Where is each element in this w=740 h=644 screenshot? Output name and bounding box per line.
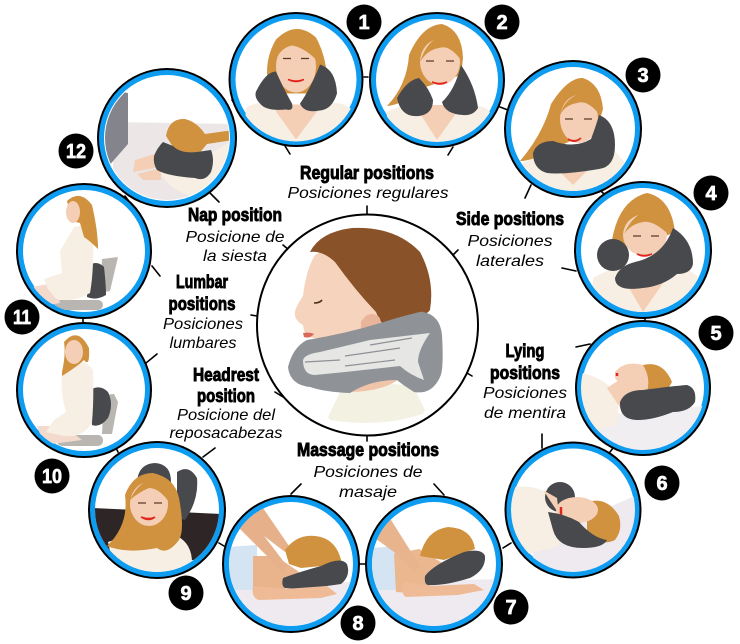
label: nap position: la siesta [203, 248, 267, 265]
label: lying positions [483, 341, 567, 422]
label: lumbar positions: lumbares [170, 335, 236, 352]
number badge 7 [494, 590, 528, 624]
number badge 12: 12 [66, 141, 86, 163]
label: headrest position: Posicione del [177, 407, 275, 424]
label: regular positions: Posiciones regulares [288, 185, 448, 202]
circle 9: headrest [88, 441, 226, 579]
number badge 6: 6 [656, 473, 668, 495]
circle 3: side position right [504, 60, 642, 201]
label: massage positions [297, 440, 439, 501]
number badge 2 [484, 4, 520, 40]
number badge 9: 9 [180, 583, 192, 605]
label: headrest position: Headrest [193, 365, 259, 385]
number badge 9 [168, 576, 204, 610]
number badge 4: 4 [705, 183, 717, 205]
label: side positions: laterales [476, 253, 544, 270]
circle 7: massage [364, 495, 503, 634]
number badge 6 [644, 466, 680, 500]
number badge 2: 2 [496, 12, 508, 34]
label: side positions [456, 209, 564, 270]
number badge 7: 7 [505, 597, 517, 619]
circle 1: regular position front [228, 12, 364, 147]
label: regular positions [288, 163, 448, 202]
number badge 5: 5 [710, 323, 722, 345]
label: lumbar positions: Posiciones [163, 316, 243, 333]
label: nap position [186, 205, 285, 265]
label: regular positions: Regular positions [300, 163, 434, 183]
connector lines [83, 77, 645, 564]
number badge 8: 8 [352, 613, 364, 635]
label: massage positions: Massage positions [297, 440, 439, 460]
number badge 4 [694, 176, 728, 210]
number badge 8 [340, 606, 376, 640]
label: lumbar positions: positions [168, 294, 236, 314]
number badge 10 [34, 458, 70, 494]
circle 6: lying on side [504, 442, 642, 580]
number badge 11: 11 [13, 307, 31, 329]
number badge 1: 1 [358, 12, 370, 34]
neck pillow with white panel [288, 312, 443, 393]
circle 11: seated lumbar side view [16, 183, 152, 319]
label: nap position: Nap position [188, 205, 282, 225]
label: lying positions: positions [490, 363, 560, 383]
label: lying positions: de mentira [484, 405, 566, 422]
circle 12: nap at desk [97, 68, 237, 208]
number badge 3: 3 [637, 65, 649, 87]
label: massage positions: Posiciones de [314, 464, 423, 481]
number badge 10: 10 [42, 466, 62, 488]
central circle: woman with neck pillow [257, 214, 478, 436]
number badge 1 [346, 4, 382, 40]
label: lumbar positions [163, 272, 243, 352]
label: headrest position: reposacabezas [170, 425, 282, 442]
label: headrest position: position [197, 386, 255, 406]
number badge 11 [4, 300, 40, 334]
number badge 3 [626, 58, 660, 92]
label: massage positions: masaje [339, 484, 397, 501]
circle 5: lying on back [573, 320, 713, 458]
label: lying positions: Posiciones [483, 385, 567, 402]
label: lying positions: Lying [506, 341, 544, 361]
label: headrest position [170, 365, 282, 442]
label: side positions: Side positions [456, 209, 564, 229]
circle 8: massage [221, 495, 360, 634]
circle 2: regular position with hair down [369, 12, 505, 148]
label: nap position: Posicione de [186, 229, 285, 246]
number badge 12 [58, 134, 94, 168]
label: lumbar positions: Lumbar [176, 272, 228, 292]
circle 4: side position left [574, 181, 712, 319]
number badge 5 [698, 316, 734, 350]
label: side positions: Posiciones [468, 233, 552, 250]
circle 10: seated headrest side view [16, 322, 152, 458]
